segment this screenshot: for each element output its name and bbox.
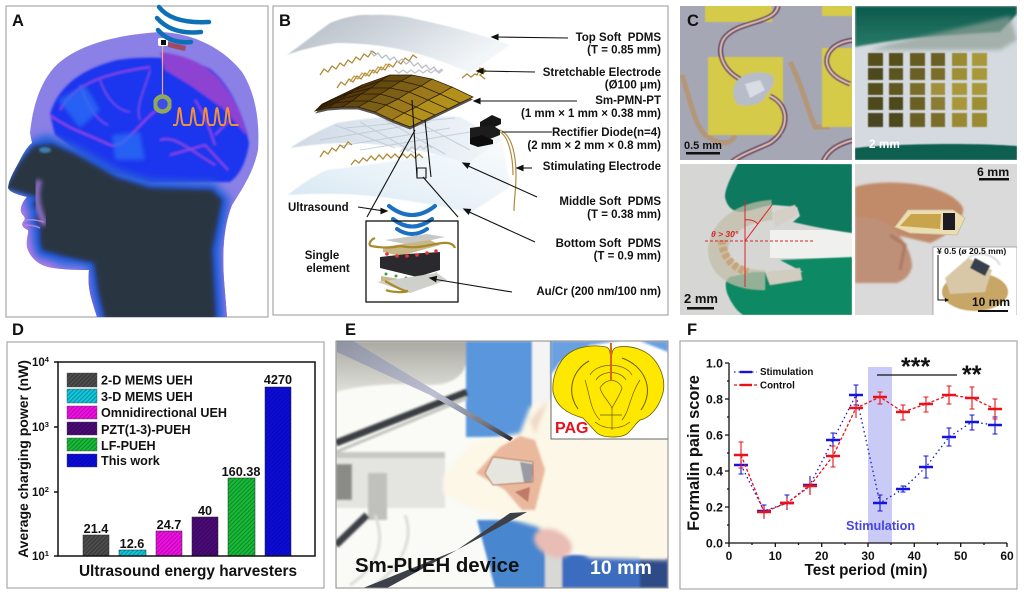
stretchable electrodes (320, 51, 486, 165)
bar value labels (84, 373, 292, 551)
side labels: Ultrasound (288, 202, 349, 214)
scale bar 2 mm (684, 294, 718, 310)
label B: B (279, 12, 291, 30)
inset: device on coin (933, 246, 1017, 316)
y axis tick labels: 0.8 (706, 392, 723, 406)
y axis tick labels: 10 (32, 487, 45, 499)
label E: E (345, 321, 356, 339)
wire and stimulating target (155, 46, 170, 112)
scale label 10 mm: 10 mm (590, 557, 652, 579)
y axis tick labels: 2 (45, 485, 49, 494)
layer labels: (1 mm × 1 mm × 0.38 mm) (521, 108, 661, 120)
series: control (734, 386, 1002, 519)
top PDMS layer (287, 15, 510, 73)
x axis tick labels: 10 (769, 549, 782, 563)
scale label 2 mm: 2 mm (869, 137, 900, 151)
panel E: surgical photo (336, 321, 668, 588)
layer labels (521, 32, 661, 298)
dark face and neck (6, 137, 228, 320)
bar value labels: 160.38 (222, 465, 260, 479)
x axis tick labels: 0 (726, 549, 733, 563)
legend (734, 367, 813, 392)
y axis tick labels: 1.0 (706, 356, 723, 370)
layer labels: Top Soft PDMS (576, 32, 661, 44)
legend: Control (760, 380, 795, 392)
y axis tick labels: 4 (45, 355, 50, 364)
panel A: head illustration (0, 6, 270, 320)
label PAG: PAG (555, 420, 588, 437)
label D: D (12, 321, 24, 339)
y axis tick labels: 1 (45, 549, 49, 558)
neural spike trace (173, 108, 238, 125)
label: Sm-PUEH device: Sm-PUEH device (355, 555, 519, 577)
bend angle annotation: θ > 30° (711, 229, 739, 239)
y axis tick labels: 0.4 (706, 464, 723, 478)
leader arrows (358, 34, 577, 292)
y axis title: Average charging power (nW) (15, 360, 31, 558)
surgical site and implanted device (476, 436, 545, 510)
layer labels: Middle Soft PDMS (559, 196, 661, 208)
single element inset (366, 221, 458, 302)
forceps (337, 341, 527, 588)
x axis title: Ultrasound energy harvesters (79, 563, 297, 580)
y axis tick labels: 0.2 (706, 500, 723, 514)
significance markers: *** (901, 353, 930, 381)
panel B: exploded device stack (273, 6, 668, 315)
significance markers: ** (962, 361, 982, 389)
zoom guide lines (367, 100, 458, 217)
rectifier diodes (470, 115, 516, 211)
x axis tick labels: 50 (954, 549, 968, 563)
y axis title: Formalin pain score (685, 375, 703, 531)
stimulation band (868, 367, 892, 543)
series: stimulation (734, 385, 1002, 517)
x axis tick labels: 30 (861, 549, 875, 563)
stimulation label: Stimulation (846, 519, 915, 533)
y axis tick labels: 0.0 (706, 536, 723, 550)
photo (336, 341, 668, 588)
axes (725, 363, 1007, 547)
layer labels: Stretchable Electrode (543, 67, 661, 79)
legend: 2-D MEMS UEH (101, 374, 193, 388)
layer labels: Bottom Soft PDMS (556, 238, 661, 250)
legend: Stimulation (760, 367, 813, 378)
legend: 3-D MEMS UEH (101, 390, 193, 404)
bar value labels: 4270 (264, 373, 292, 387)
x axis title: Test period (min) (805, 562, 927, 579)
side labels: element (306, 263, 350, 275)
side labels: Single (305, 250, 339, 262)
layer labels: Au/Cr (200 nm/100 nm) (536, 286, 661, 298)
layer labels: (T = 0.38 mm) (587, 209, 661, 221)
y axis tick labels: 10 (32, 422, 45, 434)
side labels (288, 202, 350, 275)
legend: PZT(1-3)-PUEH (101, 423, 191, 437)
scale bar 0.5 mm: 0.5 mm (684, 140, 722, 152)
bottom PDMS layer (288, 143, 510, 213)
layer labels: Rectifier Diode(n=4) (552, 127, 661, 139)
x axis tick labels: 20 (815, 549, 829, 563)
scale bar 2 mm: 2 mm (684, 291, 718, 306)
label F: F (687, 321, 697, 339)
layer labels: (T = 0.9 mm) (594, 250, 661, 262)
icon: implanted device on scalp (158, 38, 186, 51)
layer labels: (T = 0.85 mm) (587, 44, 661, 56)
photo: electrode array (855, 6, 1017, 160)
legend: LF-PUEH (101, 439, 156, 453)
middle PDMS layer (290, 116, 503, 163)
axes (54, 362, 315, 556)
ultrasound waves B (389, 206, 435, 234)
x axis tick labels: 60 (1000, 549, 1014, 563)
photo: bent device (680, 163, 852, 315)
inset: device on coin: ¥ 0.5 (ø 20.5 mm) (937, 246, 1006, 256)
y axis tick labels: 10 (32, 551, 45, 563)
legend (67, 373, 227, 468)
layer labels: Stimulating Electrode (543, 161, 661, 173)
layer labels: (2 mm × 2 mm × 0.8 mm) (527, 140, 661, 152)
layer labels: Sm-PMN-PT (595, 95, 661, 107)
bend angle annotation (705, 200, 815, 287)
bars (83, 387, 291, 556)
x axis tick labels (726, 549, 1014, 563)
label C: C (687, 12, 699, 30)
Sm-PMN-PT chip array (315, 75, 473, 130)
rat (443, 400, 668, 563)
photo: device on finger (855, 164, 1017, 316)
y axis tick labels (706, 356, 723, 550)
y axis tick labels: 10 (32, 357, 45, 369)
bar value labels: 12.6 (120, 537, 144, 551)
layer labels: (Ø100 μm) (605, 80, 661, 92)
legend: Omnidirectional UEH (101, 406, 227, 420)
bar value labels: 21.4 (84, 522, 108, 536)
significance markers (877, 353, 982, 389)
panel F: line chart (680, 321, 1017, 589)
head silhouette (8, 32, 258, 317)
bar value labels: 40 (198, 504, 212, 518)
panel C: device photos (680, 0, 1017, 316)
legend: This work (101, 454, 161, 468)
y axis tick labels: 3 (45, 420, 49, 429)
y axis tick labels: 0.6 (706, 428, 723, 442)
inset: device on coin: 10 mm (972, 295, 1010, 309)
y axis tick labels (32, 355, 50, 563)
label A: A (12, 12, 24, 30)
bar value labels: 24.7 (157, 518, 181, 532)
inset: coronal brain section with PAG (551, 341, 668, 439)
panel D: bar chart (7, 321, 324, 588)
brain (50, 52, 249, 183)
scale bar 6 mm: 6 mm (977, 165, 1009, 179)
x axis tick labels: 40 (908, 549, 921, 563)
photo: electrode pads (680, 0, 854, 162)
icon: ultrasound waves (157, 7, 209, 42)
